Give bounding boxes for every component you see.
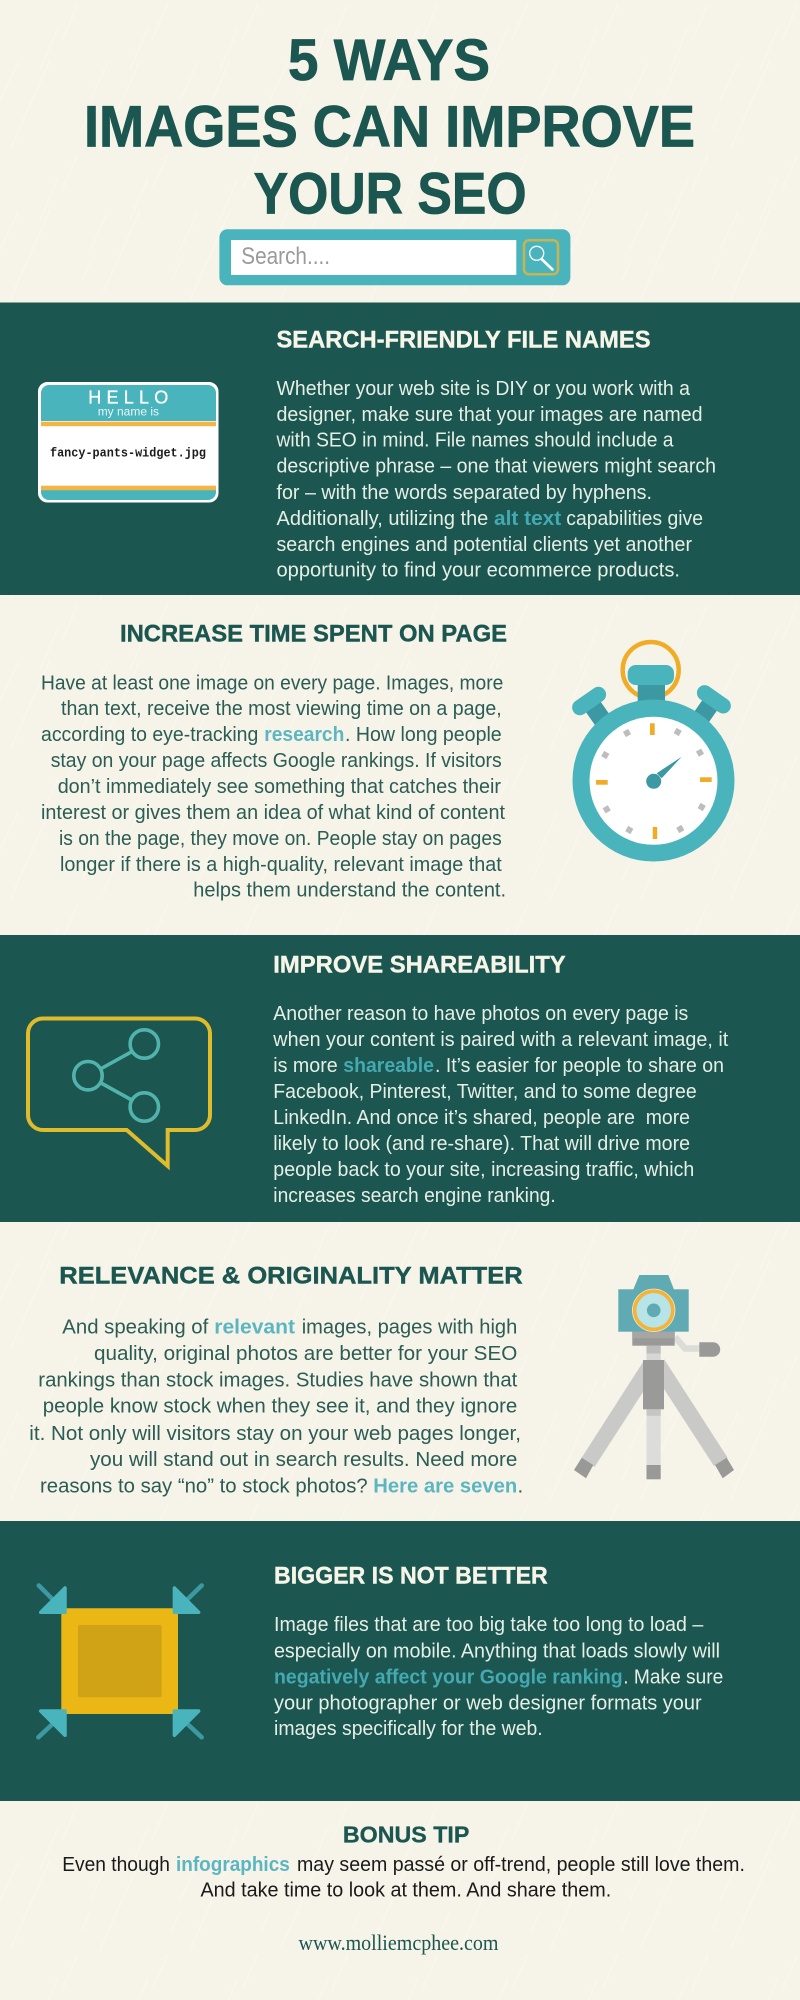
body text: may seem passé or off-trend, people still love them. [297,1853,745,1876]
body text: longer if there is a high-quality, relevant image that [60,853,502,876]
body text: Whether your web site is DIY or you work with a [276,377,691,400]
body text: descriptive phrase – one that viewers might search [276,455,716,478]
body text: search engines and potential clients yet another [276,533,692,556]
icon: camera on tripod [574,1275,734,1479]
panel: relevance and originality matter [29,1262,734,1498]
title: YOUR SEO [254,161,527,226]
icon: name tag [40,384,217,501]
heading: RELEVANCE & ORIGINALITY MATTER [59,1262,523,1289]
panel: increase time spent on page [41,621,734,902]
panel: bonus tip [62,1821,745,1955]
body text: images specifically for the web. [274,1717,543,1740]
body text [276,377,716,582]
body text: than text, receive the most viewing time on a page, [61,697,502,720]
search bar: Search.... [241,243,330,270]
panel: bigger is not better [0,1521,800,1801]
body text: especially on mobile. Anything that loads slowly will [274,1639,720,1662]
icon: share speech bubble [28,1018,210,1166]
body text: opportunity to find your ecommerce products. [276,559,680,582]
body text: when your content is paired with a relevant image, it [272,1028,729,1051]
body text: rankings than stock images. Studies have shown that [38,1369,518,1392]
body text: is on the page, they move on. People stay on pages [59,827,502,850]
icon: name tag: my name is [98,404,159,418]
title [84,28,695,226]
body text: LinkedIn. And once it’s shared, people are more [273,1106,690,1129]
body text: reasons to say “no” to stock photos? [40,1475,368,1498]
heading: INCREASE TIME SPENT ON PAGE [120,621,507,648]
body text [41,671,506,902]
body text: likely to look (and re-share). That will drive more [273,1132,690,1155]
body text: Image files that are too big take too long to load – [274,1613,704,1636]
body text: research [264,723,344,746]
body text: Facebook, Pinterest, Twitter, and to some degree [273,1080,697,1103]
body text: for – with the words separated by hyphens. [276,481,652,504]
body text: people know stock when they see it, and they ignore [43,1395,517,1418]
body text: . How long people [345,723,502,746]
body text: Even though [62,1853,170,1876]
title: IMAGES CAN IMPROVE [84,95,695,160]
body text [272,1002,729,1207]
body text: Have at least one image on every page. Images, more [41,671,503,694]
body text: quality, original photos are better for your SEO [94,1342,517,1365]
icon: name tag: HELLO [88,387,168,407]
body text: . Make sure [623,1665,723,1688]
body text: Additionally, utilizing the [276,507,488,530]
icon: shrink image arrows [38,1586,202,1737]
body text: images, pages with high [302,1315,517,1338]
body text: your photographer or web designer formats your [274,1691,702,1714]
body text: negatively affect your Google ranking [274,1665,623,1688]
panel: search-friendly file names [0,302,800,595]
body text: according to eye-tracking [41,723,258,746]
body text: with SEO in mind. File names should include a [276,429,674,452]
website url: www.molliemcphee.com [298,1930,498,1955]
body text [29,1315,523,1498]
body text: relevant [214,1315,295,1338]
title: 5 WAYS [288,28,490,93]
icon: magnifying glass button [524,240,558,274]
body text: infographics [176,1853,290,1876]
body text: don’t immediately see something that catches their [58,775,501,798]
body text: it. Not only will visitors stay on your web pages longer, [29,1422,521,1445]
body text: is more [273,1054,338,1077]
search bar [219,229,570,285]
heading: IMPROVE SHAREABILITY [273,952,566,979]
body text: stay on your page affects Google rankings. If visitors [51,749,502,772]
body text: people back to your site, increasing traffic, which [273,1158,694,1181]
heading: BIGGER IS NOT BETTER [274,1562,548,1589]
body text [62,1853,745,1902]
body text: designer, make sure that your images are named [276,403,702,426]
body text: . [518,1475,523,1498]
heading: SEARCH-FRIENDLY FILE NAMES [276,327,650,354]
body text: increases search engine ranking. [273,1184,556,1207]
body text: . It’s easier for people to share on [435,1054,724,1077]
icon: name tag: fancy-pants-widget.jpg [50,446,206,461]
body text: Another reason to have photos on every page is [273,1002,688,1025]
body text: interest or gives them an idea of what kind of content [41,801,505,824]
body text: alt text [494,507,561,530]
body text: shareable [343,1054,434,1077]
icon: stopwatch [569,642,734,862]
body text: And speaking of [62,1315,209,1338]
body text: helps them understand the content. [193,879,506,902]
body text: you will stand out in search results. Need more [90,1448,517,1471]
body text: Here are seven [373,1475,517,1498]
heading: BONUS TIP [343,1821,469,1847]
body text: And take time to look at them. And share them. [200,1879,611,1902]
body text [274,1613,723,1740]
body text: capabilities give [566,507,703,530]
panel: improve shareability [0,935,800,1222]
